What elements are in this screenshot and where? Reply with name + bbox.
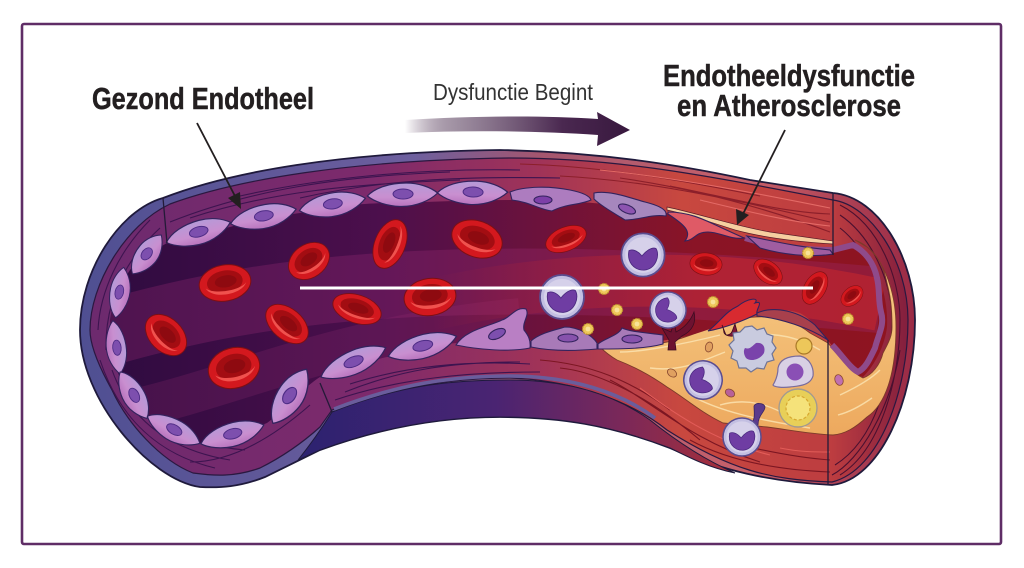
arrow: to dysfunctional endothelium [736, 130, 785, 225]
deposit [666, 367, 678, 379]
flattened cell [531, 327, 597, 350]
label: dysfunction begins: Dysfunctie Begint [433, 79, 594, 105]
small deposits in plaque [666, 341, 845, 399]
cell [105, 266, 135, 320]
arrow head [736, 209, 749, 225]
dark infiltrating strand [722, 324, 738, 336]
heading: endothelial dysfunction and atherosclerosis [663, 58, 915, 123]
white reference line [300, 286, 813, 290]
lumen light band lower [130, 318, 520, 410]
migrating cell stem [750, 403, 765, 425]
lipid particles [582, 248, 854, 354]
activated endothelial cells [456, 187, 833, 350]
particle [612, 304, 622, 316]
ruptured lesion [708, 299, 760, 331]
artery outer wall [80, 150, 915, 487]
plaque [600, 240, 896, 435]
arrow head [228, 192, 241, 209]
muscle fibres [98, 164, 900, 475]
particle [802, 248, 814, 258]
cell [163, 213, 234, 253]
lumen light band upper [100, 281, 880, 335]
cell [142, 406, 205, 454]
heading line 1: Endotheeldysfunctie [663, 58, 915, 93]
cell nucleus [487, 326, 507, 342]
rbc [366, 215, 414, 273]
damaged cell [747, 236, 833, 256]
large particle [796, 338, 812, 354]
particle [842, 314, 854, 324]
back wall of the vessel [298, 380, 735, 473]
healthy endothelial cells [104, 180, 508, 454]
rbc [797, 267, 833, 309]
cell [316, 338, 391, 387]
fat-laden cell core [786, 396, 810, 420]
heading line 2: en Atherosclerose [677, 88, 901, 123]
particle [632, 318, 642, 330]
cell [261, 363, 319, 430]
artery illustration [80, 150, 915, 487]
deposit [704, 341, 714, 353]
arrow: to healthy endothelium [197, 123, 241, 209]
lumen inner highlight [430, 281, 880, 305]
rbc [204, 342, 264, 394]
lumen base [100, 190, 900, 450]
rbc [749, 254, 787, 290]
particle [582, 324, 594, 334]
red blood cells [137, 213, 867, 394]
cell [111, 366, 156, 424]
flattened cell [598, 328, 663, 349]
rbc [281, 235, 337, 287]
cell with projection [456, 309, 530, 350]
foam cell [773, 356, 813, 387]
rbc [196, 261, 254, 305]
rbc [542, 220, 590, 258]
cell [104, 320, 129, 375]
particle [598, 284, 610, 294]
cell [298, 188, 367, 221]
rbc [258, 296, 316, 352]
arrow shaft [743, 130, 785, 214]
damaged cell [510, 187, 591, 211]
rbc [329, 288, 385, 330]
white blood cells [540, 233, 817, 456]
flattened cell nucleus [558, 334, 578, 342]
wbc [540, 275, 584, 319]
deposit [724, 387, 736, 399]
rbc [689, 251, 723, 277]
rbc [837, 281, 867, 311]
fibrous cap [757, 310, 828, 340]
wbc [621, 233, 665, 277]
damaged fragment [668, 212, 744, 241]
cell [123, 229, 171, 280]
cell [437, 180, 508, 206]
damaged cell [594, 192, 666, 220]
spiky foam cell [729, 326, 776, 372]
fat-laden cell [779, 389, 817, 427]
wbc [645, 287, 691, 333]
cut lines [163, 193, 833, 485]
nucleus [534, 196, 552, 204]
deposit [833, 373, 845, 387]
rbc [402, 275, 458, 319]
migrating cell [723, 418, 761, 456]
dark infiltrating strands [662, 312, 695, 350]
cell [385, 327, 460, 367]
foam cell nucleus [744, 343, 765, 360]
particle [708, 296, 718, 308]
plaque streaks [620, 334, 880, 428]
muscle layer [90, 158, 908, 482]
cell [228, 199, 298, 234]
arrow shaft [197, 123, 236, 198]
arrow: progression [405, 112, 630, 146]
vessel lumen [100, 190, 900, 450]
cell [367, 183, 438, 207]
wbc [678, 355, 728, 405]
flattened cell nucleus [622, 335, 642, 343]
nucleus [617, 202, 637, 216]
upper plaque sliver [667, 207, 833, 244]
rbc [446, 213, 508, 265]
rbc [137, 306, 195, 364]
cell [198, 415, 267, 454]
foam cell nucleus [786, 364, 804, 380]
heading: healthy endothelium: Gezond Endotheel [92, 81, 314, 116]
back wall rim [334, 376, 655, 418]
damaged lining on the right [745, 238, 882, 372]
